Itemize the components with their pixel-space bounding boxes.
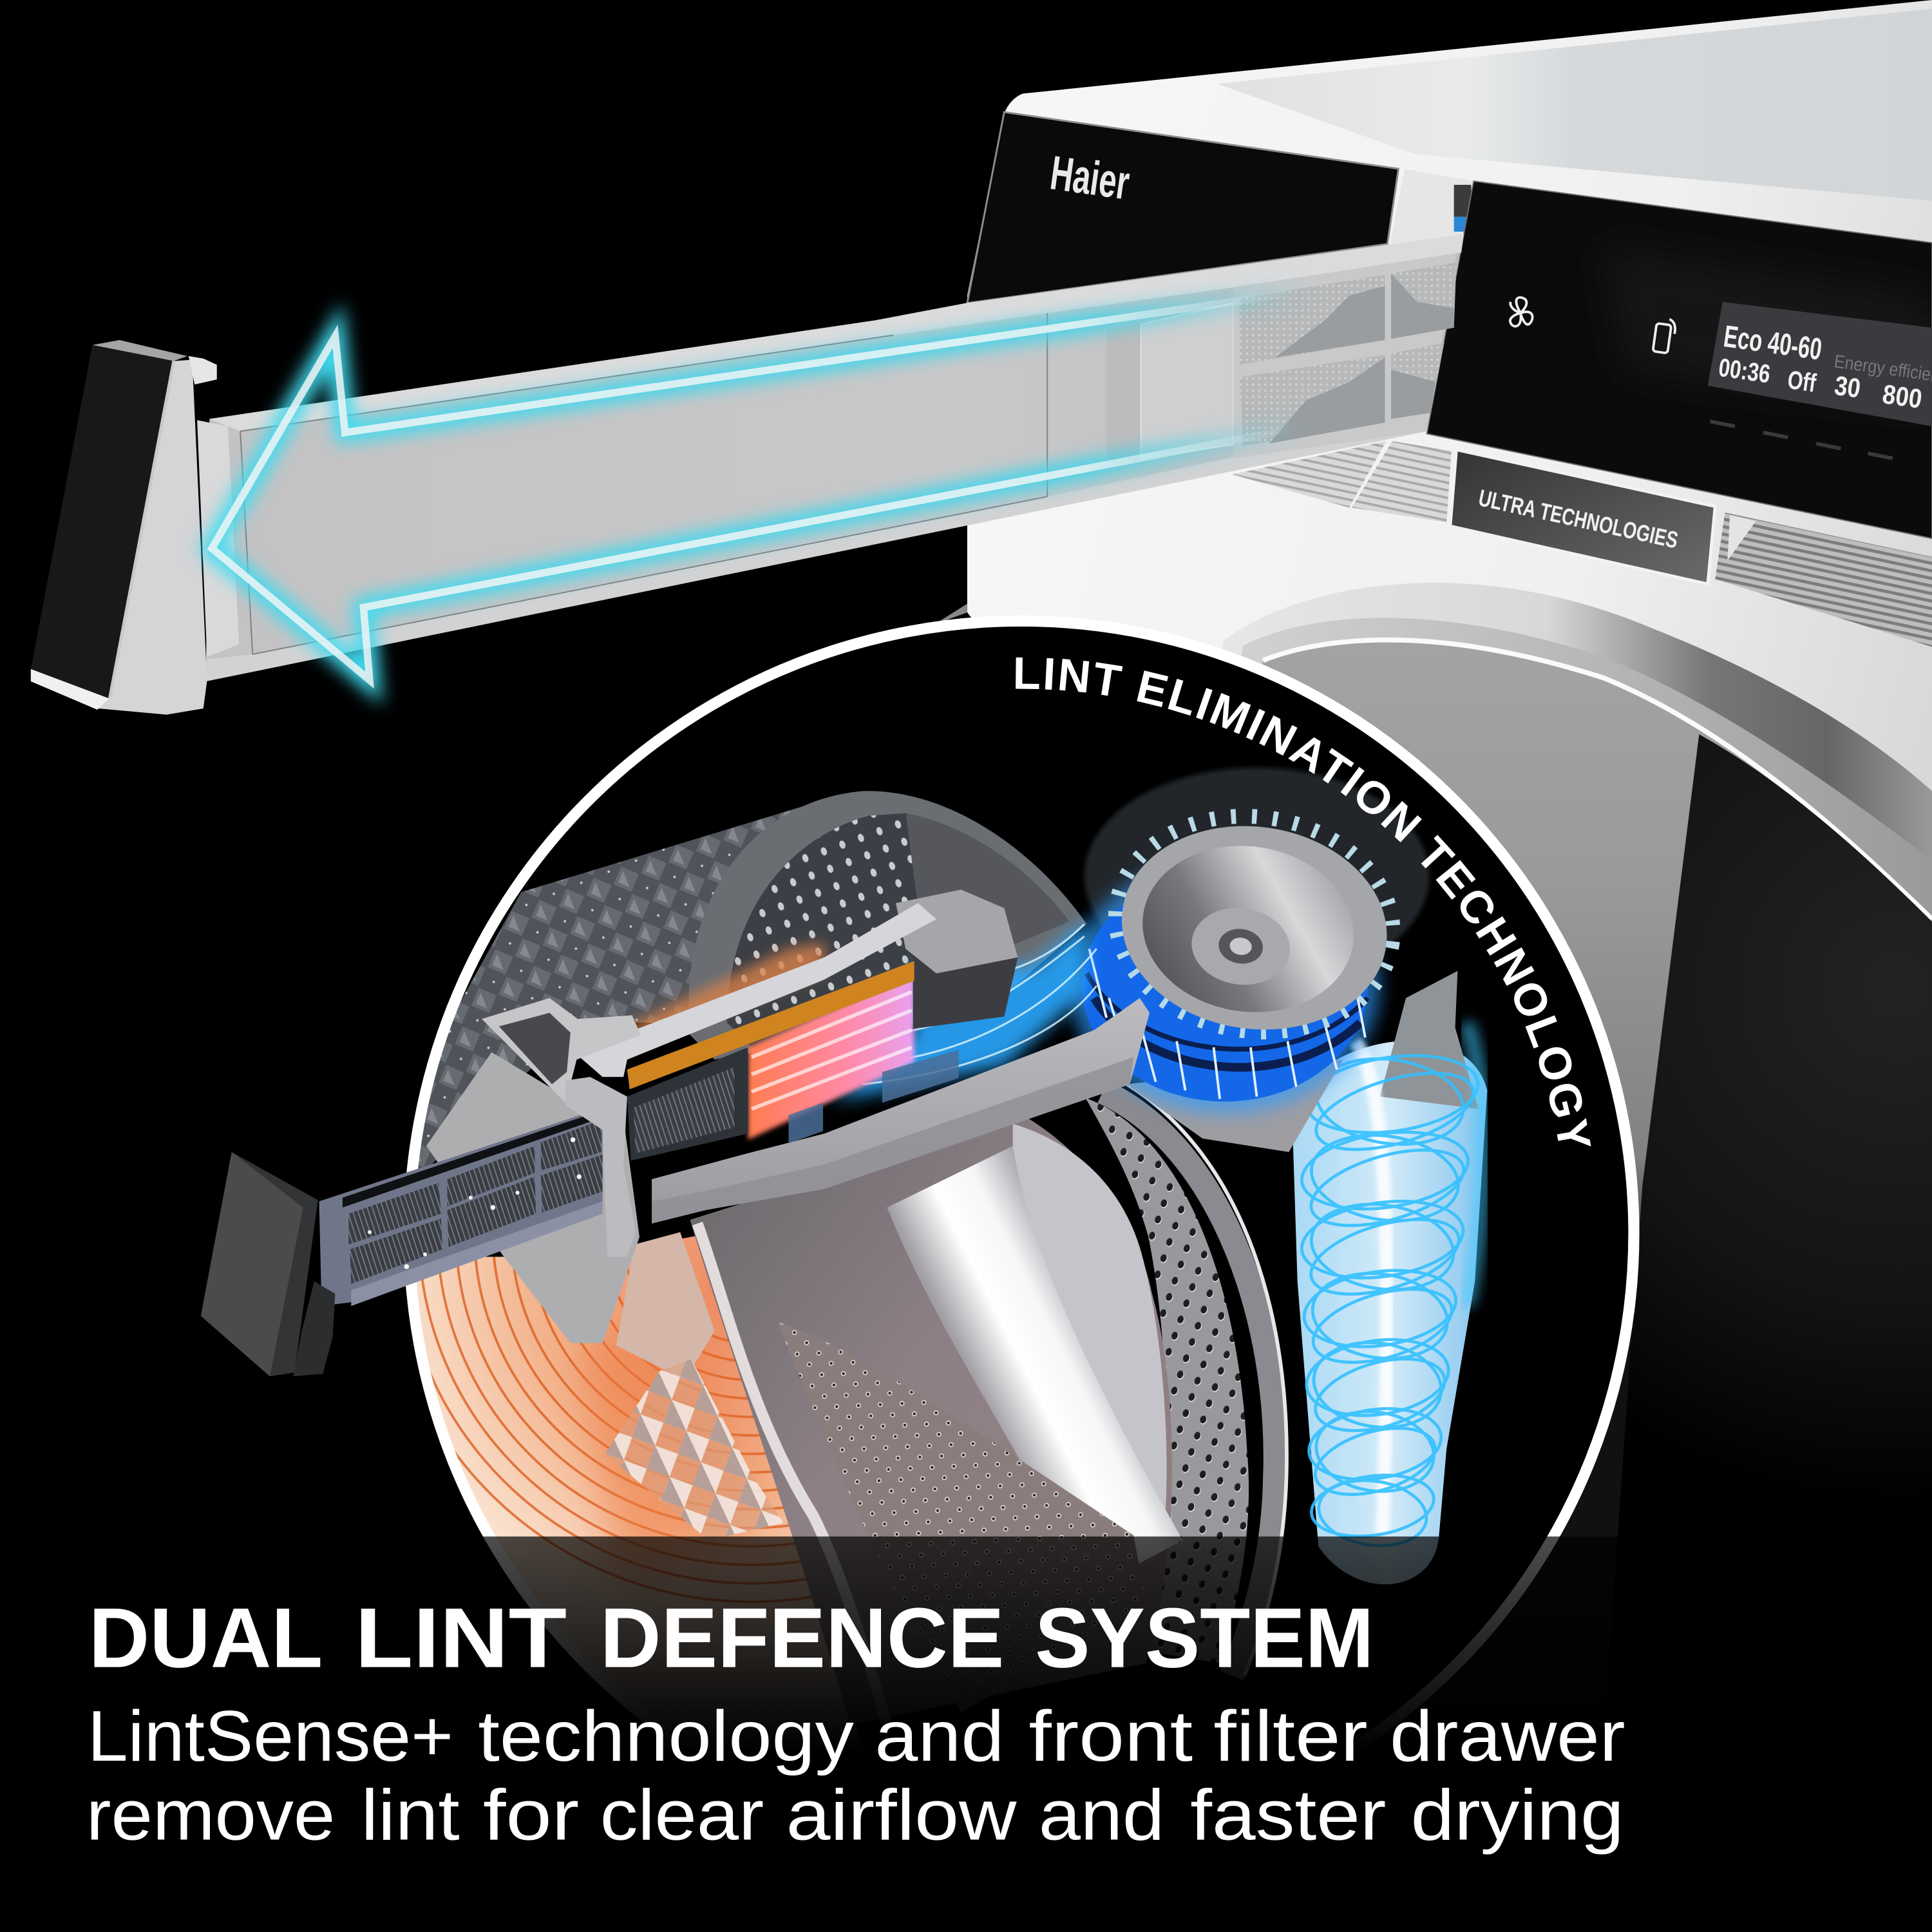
front drum perforated wall xyxy=(1086,1098,1249,1663)
panel dashes xyxy=(1710,421,1893,459)
top surface recess xyxy=(1217,8,1932,201)
line two: lint xyxy=(361,1776,460,1855)
filter drawer pulled out xyxy=(31,234,1464,715)
drum baffle xyxy=(887,1146,1183,1589)
display screen: 30 xyxy=(1833,370,1862,404)
cartridge rail xyxy=(351,1201,603,1306)
filter junction xyxy=(565,1077,636,1257)
line two: airflow xyxy=(786,1776,1017,1855)
airflow blue stream xyxy=(831,922,1097,1101)
display screen: Eco 40-60 xyxy=(1721,319,1824,367)
line one: drawer xyxy=(1390,1696,1625,1776)
line two: remove xyxy=(86,1776,335,1855)
drawer top lip xyxy=(209,234,1464,431)
line two: faster xyxy=(1190,1776,1386,1855)
heat exchanger bracket xyxy=(896,889,1018,973)
right control panel xyxy=(1427,181,1932,538)
line one xyxy=(88,1696,1625,1776)
drawer filter cartridge xyxy=(319,1108,603,1306)
heading: LINT xyxy=(355,1590,567,1685)
door outer recess xyxy=(1021,583,1932,1932)
ultra technologies badge xyxy=(1450,450,1715,584)
drawer join cover xyxy=(1106,303,1233,468)
door white line xyxy=(1263,640,1932,919)
fan impeller cap xyxy=(1101,799,1407,1050)
icon: phone wifi xyxy=(1653,319,1675,354)
studded drum wall xyxy=(605,1359,784,1540)
brand logo: Haier xyxy=(1047,145,1133,210)
curved label: LINT ELIMINATION TECHNOLOGY xyxy=(1016,657,1591,1146)
vents under panel xyxy=(1232,441,1932,647)
description text xyxy=(86,1696,1625,1855)
heating coil xyxy=(416,1236,857,1731)
line two: for xyxy=(483,1776,579,1855)
display screen: 00:36 xyxy=(1717,353,1772,389)
drum inner white rim xyxy=(697,1224,887,1725)
rear drum rim xyxy=(688,791,1087,1059)
fan stator xyxy=(1070,858,1380,1114)
heading: SYSTEM xyxy=(1035,1590,1374,1685)
display screen: Off xyxy=(1786,365,1818,398)
line one: front xyxy=(1029,1696,1193,1776)
circular inset: internal view xyxy=(201,616,1640,1731)
left control panel xyxy=(967,112,1399,303)
body side notch xyxy=(934,604,967,625)
duct support xyxy=(788,1050,959,1144)
heat exchanger fins xyxy=(627,961,914,1089)
heading: DEFENCE xyxy=(600,1590,1004,1685)
inner perforated panel xyxy=(777,1322,1146,1712)
funnel frame xyxy=(482,998,641,1103)
door silver ring xyxy=(1021,618,1932,1932)
bottom dark overlay xyxy=(0,1537,1932,1932)
heat exchanger glow xyxy=(748,973,914,1140)
line two: clear xyxy=(600,1776,764,1855)
display screen: 800 xyxy=(1880,379,1924,414)
display screen xyxy=(1708,302,1932,426)
arrow glow xyxy=(212,291,1306,680)
circle ring xyxy=(409,621,1634,1846)
front drum white rim line xyxy=(1128,1084,1287,1676)
drum smooth panel xyxy=(1013,1124,1167,1528)
machine body xyxy=(967,0,1932,961)
drawer handle xyxy=(31,340,217,715)
drawer bar xyxy=(206,234,1464,681)
drawer neck xyxy=(197,420,239,657)
water stream xyxy=(1356,1041,1387,1534)
column grey prism xyxy=(1380,971,1479,1109)
filter end cap xyxy=(201,1152,335,1376)
front drum rim xyxy=(1103,1092,1276,1676)
drawer lower lip xyxy=(206,419,1427,681)
impeller teeth xyxy=(1101,799,1407,1050)
heat glow arc xyxy=(604,943,824,1050)
icon: fan xyxy=(1510,298,1533,327)
fan mount xyxy=(1126,1059,1343,1152)
blue airflow spirals xyxy=(1297,1046,1483,1552)
rear drum inner chamber xyxy=(905,813,1070,949)
line one: LintSense+ xyxy=(88,1696,453,1776)
front drum interior xyxy=(690,1115,1172,1725)
line two xyxy=(86,1776,1624,1855)
line two: drying xyxy=(1411,1776,1624,1855)
lint filter xyxy=(1233,254,1456,459)
heat exchanger rear wall xyxy=(913,952,1018,1029)
panel gap column xyxy=(1390,169,1473,244)
heading: DUAL xyxy=(89,1590,323,1685)
funnel cone xyxy=(426,1052,639,1343)
water column xyxy=(1291,971,1487,1584)
rear housing haze xyxy=(1083,766,1431,950)
heat exchanger tube xyxy=(574,903,936,1077)
lint specks xyxy=(368,1137,582,1269)
rear drum side xyxy=(394,806,804,1171)
air duct tray xyxy=(652,998,1150,1224)
line one: technology xyxy=(478,1696,854,1776)
door xyxy=(1021,583,1932,1932)
column outer glow xyxy=(1466,1023,1482,1306)
line one: filter xyxy=(1214,1696,1368,1776)
rear filter panel xyxy=(627,1047,748,1160)
door grey glass xyxy=(1021,640,1932,1932)
perforated triangle wall xyxy=(616,1232,715,1380)
rear drum face xyxy=(726,813,917,1048)
funnel opening xyxy=(499,1013,571,1084)
arrow outline xyxy=(212,291,1306,680)
line one: and xyxy=(875,1696,1004,1776)
heading xyxy=(89,1590,1374,1685)
line two: and xyxy=(1039,1776,1164,1855)
ultra technologies badge: ULTRA TECHNOLOGIES xyxy=(1476,484,1680,554)
washer dryer machine xyxy=(934,0,1932,1932)
door black glass xyxy=(1589,734,1932,1932)
